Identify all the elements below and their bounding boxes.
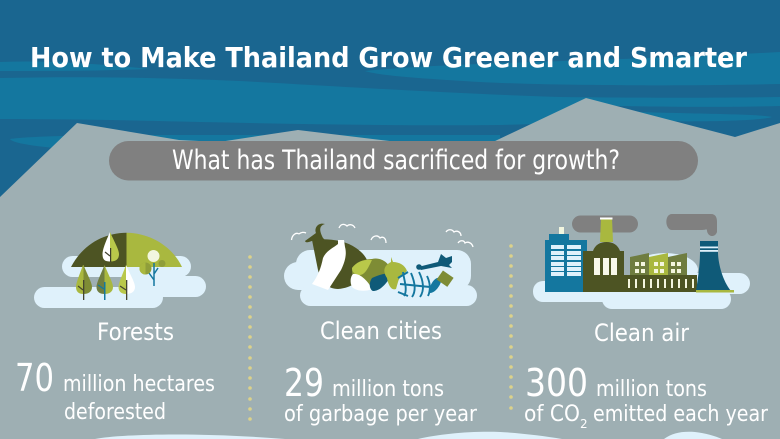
title: How to Make Thailand Grow Greener and Smarter bbox=[30, 42, 747, 74]
label: Clean air: Clean air bbox=[594, 319, 689, 347]
stat: air: of CO bbox=[524, 402, 580, 427]
section heading pill bbox=[109, 141, 698, 180]
mountains bbox=[0, 98, 780, 439]
stat: cities bbox=[284, 361, 478, 427]
icon: garbage bbox=[284, 224, 477, 306]
stat: air bbox=[524, 361, 769, 431]
stat: forests bbox=[15, 356, 215, 425]
icon: forest bbox=[34, 232, 206, 308]
stat: air: 2 bbox=[580, 417, 588, 431]
label: Forests: Forests bbox=[97, 318, 174, 346]
stat: cities: million tons bbox=[332, 377, 444, 402]
icon: factory bbox=[533, 214, 750, 309]
label: Clean cities: Clean cities bbox=[320, 317, 442, 345]
stat: forests: 70 bbox=[15, 356, 54, 400]
bottom clouds bbox=[95, 432, 722, 439]
stat: cities: 29 bbox=[284, 361, 324, 405]
stat: forests: million hectares bbox=[63, 372, 215, 397]
stat: forests: deforested bbox=[64, 400, 166, 425]
stat: cities: of garbage per year bbox=[284, 402, 478, 427]
stat: air: 300 bbox=[525, 361, 588, 405]
section heading pill: What has Thailand sacrificed for growth? bbox=[172, 145, 620, 176]
stat: air: million tons bbox=[596, 377, 707, 402]
